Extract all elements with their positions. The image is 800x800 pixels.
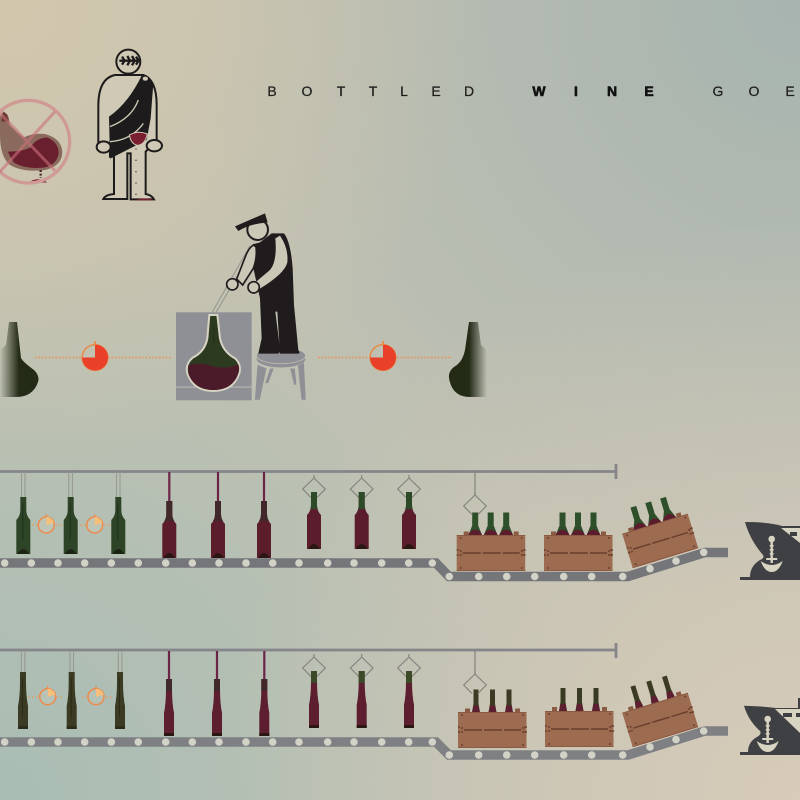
decanter right cropped <box>449 322 487 397</box>
crate one <box>458 651 527 748</box>
title: GOE <box>713 83 795 99</box>
wine filling bottles <box>162 472 271 558</box>
small timers <box>32 514 110 533</box>
crate two <box>544 512 613 571</box>
crate two <box>545 688 614 747</box>
empty green bottles <box>16 472 125 554</box>
conveyor belt <box>0 548 728 580</box>
decanter <box>187 315 240 391</box>
title figure: cellar worker decanting <box>176 213 306 400</box>
timer right <box>370 341 396 371</box>
title: WINE <box>532 83 654 99</box>
worker arms and hands <box>227 236 287 293</box>
rods <box>212 246 253 314</box>
worker head and cap <box>235 213 268 240</box>
decanter left cropped <box>0 322 38 397</box>
corked bottles with claws <box>303 475 420 549</box>
ship one <box>740 522 800 580</box>
conveyor belt <box>0 727 728 759</box>
worker body <box>253 233 299 354</box>
crate three tilted <box>616 492 699 568</box>
empty flute bottles <box>18 651 125 729</box>
production line 1 <box>0 464 800 580</box>
grey work box <box>176 312 252 400</box>
small timers <box>28 686 114 705</box>
timer left <box>82 341 108 371</box>
icon: toga figure with wine stain <box>97 50 162 200</box>
production line 2 <box>0 643 800 759</box>
stool <box>255 348 306 400</box>
crate one <box>457 472 526 571</box>
dotted timing lines <box>35 356 452 358</box>
ship two <box>740 698 800 755</box>
title <box>267 83 795 99</box>
wine filling flutes <box>164 651 269 736</box>
overhead rail <box>0 643 616 658</box>
icon: crossed-out chicken <box>0 100 70 183</box>
title: BOTTLED <box>267 83 474 99</box>
overhead rail <box>0 464 616 479</box>
crate three tilted <box>616 671 699 747</box>
corked flutes with claws <box>303 654 420 728</box>
